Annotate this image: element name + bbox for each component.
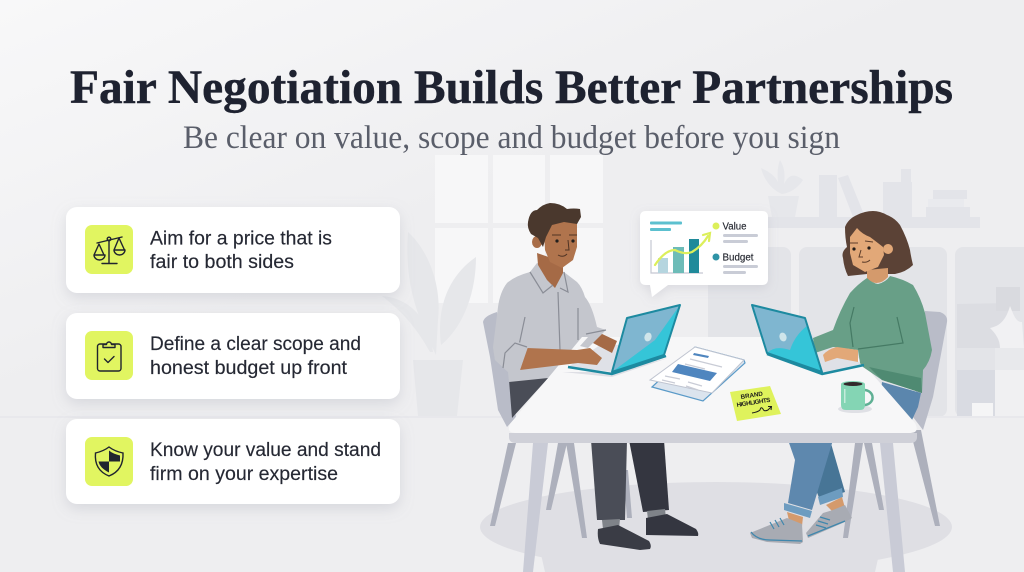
card text: honest budget up front — [150, 358, 348, 379]
subtitle: Be clear on value, scope and budget before you sign — [183, 120, 840, 156]
sticky note — [730, 386, 781, 421]
chair legs — [490, 443, 632, 538]
sweater — [813, 276, 932, 393]
cabinets — [708, 247, 1024, 417]
hand — [823, 347, 858, 362]
documents — [650, 347, 745, 401]
card text: Know your value and stand — [150, 440, 381, 461]
window — [435, 155, 603, 303]
card text: Aim for a price that is — [150, 228, 332, 250]
shirt details — [518, 272, 578, 350]
card: scope and budget — [66, 313, 400, 399]
face — [850, 228, 884, 272]
card text: Define a clear scope and — [150, 334, 361, 355]
sticky note: HIGHLIGHTS — [736, 397, 771, 409]
wall shelf with books — [768, 169, 980, 228]
icon: clipboard — [85, 331, 133, 380]
card: know your value — [66, 419, 400, 504]
laptop decks — [562, 330, 864, 377]
neck — [867, 268, 888, 283]
trousers upper — [509, 376, 550, 418]
shelf plant — [761, 160, 803, 217]
card text: fair to both sides — [150, 252, 294, 273]
man: legs and shoes — [509, 376, 698, 550]
laptop: man — [568, 305, 680, 374]
man: arms — [493, 327, 617, 372]
card: fair price — [66, 207, 400, 293]
floor shadow — [480, 482, 952, 572]
woman: legs and shoes — [750, 382, 921, 544]
legend: budget: Budget — [722, 252, 754, 264]
chair legs — [843, 430, 940, 538]
table — [509, 337, 917, 572]
icon: scales — [85, 225, 133, 274]
chair: woman — [843, 311, 947, 538]
laptop: woman — [752, 305, 864, 374]
speech bubble: value and budget chart — [640, 211, 768, 297]
icon: shield — [85, 437, 133, 486]
sticky note: BRAND — [740, 390, 764, 401]
shirt — [493, 263, 597, 382]
floor line — [0, 416, 1024, 418]
man: torso and head — [493, 203, 597, 382]
chair: man — [483, 312, 632, 538]
mug — [838, 381, 873, 413]
bar chart — [651, 233, 710, 273]
head — [544, 222, 577, 268]
woman: torso and head — [813, 211, 932, 393]
right corner boxes and plant — [957, 287, 1024, 417]
floor plant — [382, 232, 476, 416]
background office scene — [0, 155, 1024, 572]
chart heading lines — [650, 222, 682, 231]
hair — [842, 211, 913, 276]
legend: value: Value — [722, 220, 747, 232]
card text: firm on your expertise — [150, 464, 338, 485]
title: Fair Negotiation Builds Better Partnerships — [70, 61, 953, 114]
neck — [537, 253, 563, 288]
